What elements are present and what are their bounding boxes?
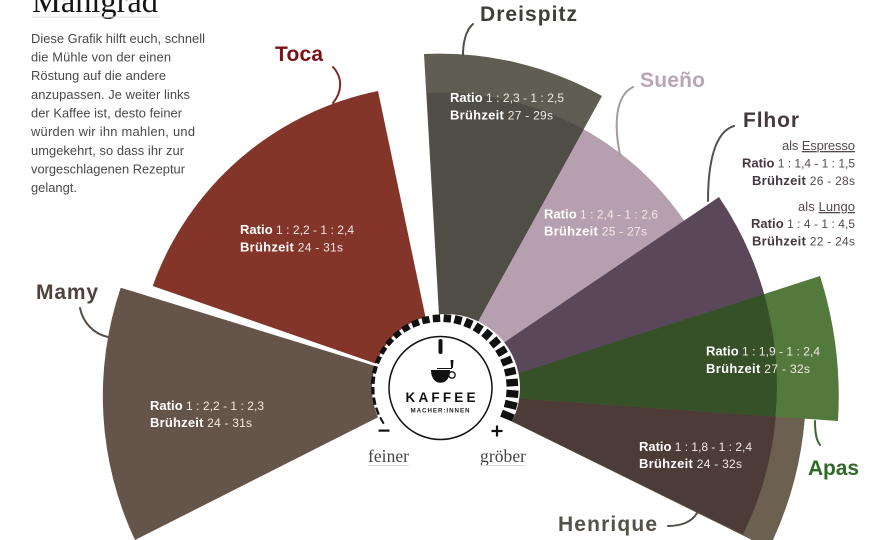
grind scale ring — [371, 314, 519, 424]
data: Henrique: Brühzeit 24 - 32s — [639, 456, 742, 471]
leader line: Sueño — [617, 87, 633, 155]
data: Mamy — [150, 398, 264, 430]
intro text: vorgeschlagenen Rezeptur — [31, 162, 186, 176]
label: Toca: Toca — [275, 43, 323, 66]
data: Mamy: Ratio 1 : 2,2 - 1 : 2,3 — [150, 398, 264, 413]
data: Flhor: als Espresso — [782, 138, 855, 153]
label: gröber: gröber — [480, 446, 526, 466]
data: Apas: Ratio 1 : 1,9 - 1 : 2,4 — [706, 344, 820, 358]
intro text: Diese Grafik hilft euch, schnell — [31, 31, 205, 46]
data: Dreispitz — [450, 90, 564, 122]
data: Sueño: Brühzeit 25 - 27s — [544, 224, 647, 238]
data: Flhor: Ratio 1 : 4 - 1 : 4,5 — [751, 216, 855, 231]
data: Apas: Brühzeit 27 - 32s — [706, 361, 810, 376]
intro text: anzupassen. Je weiter links — [31, 87, 190, 102]
data: Toca — [240, 222, 354, 254]
leader line: Dreispitz — [463, 24, 473, 55]
wedge: Apas — [454, 276, 839, 421]
label: Mamy: Mamy — [36, 281, 98, 304]
leader line: Mamy — [80, 308, 108, 337]
data: Flhor: als Lungo — [798, 199, 855, 214]
leader line: Henrique — [668, 513, 697, 526]
data: Dreispitz: Brühzeit 27 - 29s — [450, 108, 553, 122]
icon: coffee cup — [431, 360, 455, 383]
data: Apas — [706, 344, 820, 376]
data: Flhor: Brühzeit 26 - 28s — [752, 173, 855, 188]
data: Flhor: Ratio 1 : 1,4 - 1 : 1,5 — [742, 156, 855, 170]
data: Dreispitz: Ratio 1 : 2,3 - 1 : 2,5 — [450, 90, 564, 105]
wedge: Dreispitz — [424, 54, 602, 322]
plus sign — [492, 426, 502, 436]
wedge: Henrique — [440, 386, 806, 540]
intro text: Röstung auf die andere — [31, 68, 166, 83]
label: Apas: Apas — [808, 457, 859, 480]
data: Sueño: Ratio 1 : 2,4 - 1 : 2,6 — [544, 206, 658, 222]
hub background — [372, 314, 520, 462]
label: Flhor: Flhor — [743, 109, 799, 132]
intro text — [30, 31, 205, 195]
leader line: Flhor — [708, 126, 734, 201]
label: Sueño: Sueño — [640, 69, 705, 92]
minus sign — [378, 430, 390, 432]
data: Toca: Ratio 1 : 2,2 - 1 : 2,4 — [240, 222, 354, 237]
wedge: Sueño — [427, 93, 730, 385]
data: Flhor — [742, 138, 855, 248]
intro text: gelangt. — [31, 180, 77, 195]
wedge: Toca — [153, 91, 440, 386]
logo wordmark: KAFFEE — [406, 390, 476, 405]
intro text: der Kaffee ist, desto feiner — [31, 106, 183, 120]
logo: Kaffee Macher:innen — [389, 336, 492, 440]
icon: grinder pointer — [438, 339, 442, 354]
data: Henrique: Ratio 1 : 1,8 - 1 : 2,4 — [639, 439, 752, 454]
wedge: Mamy — [103, 288, 440, 540]
wedge: Flhor — [440, 197, 777, 386]
label: Henrique: Henrique — [558, 513, 657, 536]
intro text: die Mühle von der einen — [31, 50, 171, 64]
label: feiner: feiner — [368, 446, 409, 466]
data: Flhor: Brühzeit 22 - 24s — [752, 234, 855, 248]
logo subline: MACHER:INNEN — [410, 408, 470, 414]
data: Henrique — [639, 439, 752, 471]
data: Toca: Brühzeit 24 - 31s — [240, 240, 343, 254]
leader line: Toca — [333, 67, 340, 103]
intro text: würden wir ihn mahlen, und — [30, 124, 195, 139]
label: Dreispitz: Dreispitz — [480, 3, 577, 26]
leader line: Apas — [815, 421, 820, 445]
data: Sueño — [544, 206, 658, 238]
intro text: umgekehrt, so dass ihr zur — [31, 143, 185, 158]
data: Mamy: Brühzeit 24 - 31s — [150, 415, 252, 430]
